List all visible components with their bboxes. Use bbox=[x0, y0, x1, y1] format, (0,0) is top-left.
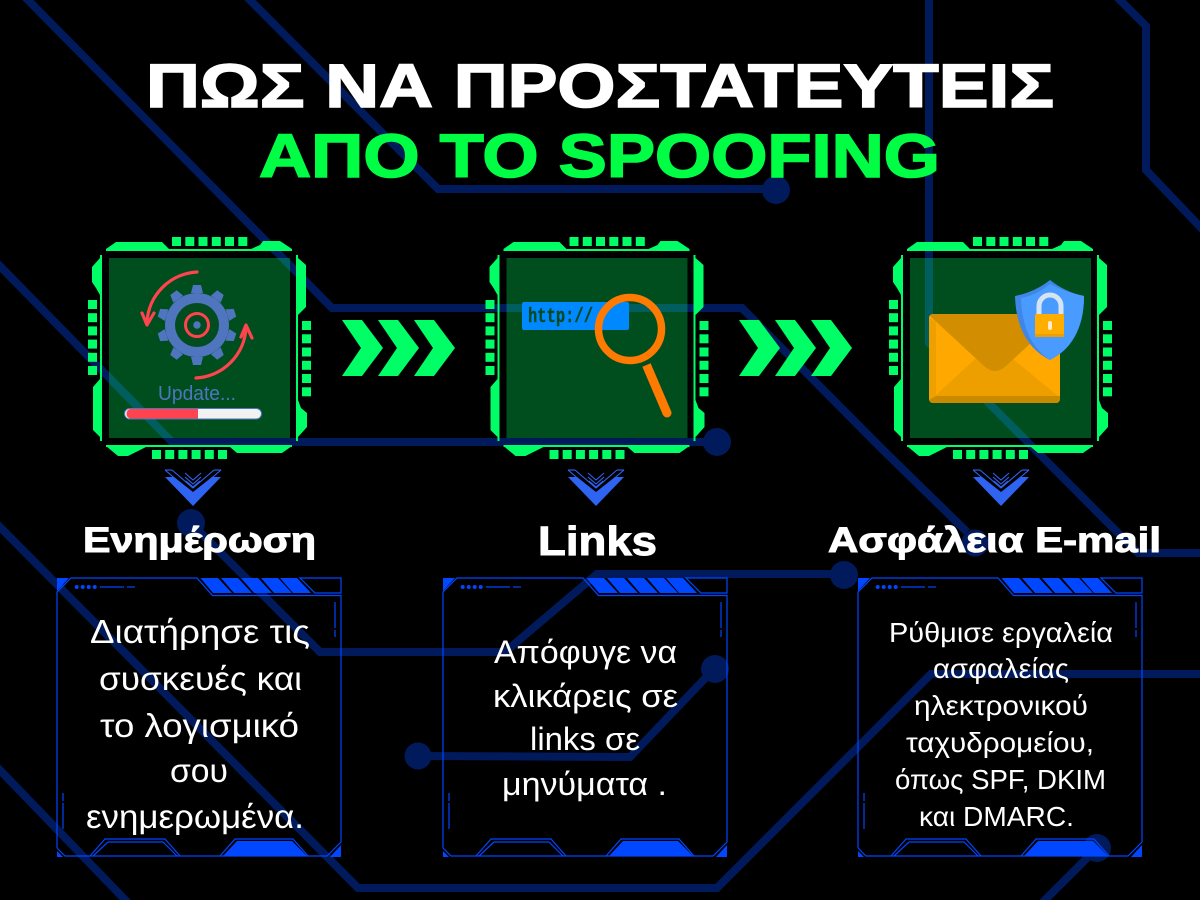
arrows: step 1 to 2 bbox=[342, 320, 455, 376]
title bbox=[146, 52, 1054, 190]
text block: links: μηνύματα . bbox=[502, 766, 667, 802]
panel: email security bbox=[858, 578, 1142, 857]
text block: email security: και DMARC. bbox=[919, 801, 1074, 832]
text block: email security: όπως SPF, DKIM bbox=[895, 764, 1106, 795]
icon: url bar and magnifier: http:// bbox=[528, 306, 593, 329]
text block: update: σου bbox=[170, 753, 228, 790]
text block: email security bbox=[889, 617, 1113, 832]
text block: update: Διατήρησε τις bbox=[90, 614, 310, 651]
update label: Update... bbox=[158, 383, 236, 405]
down arrow 2 bbox=[568, 470, 624, 506]
text block: links: Απόφυγε να bbox=[494, 634, 677, 670]
down arrow 1 bbox=[165, 470, 221, 506]
heading: update: Ενημέρωση bbox=[83, 521, 316, 560]
text block: update: το λογισμικό bbox=[100, 708, 299, 745]
text block: email security: ηλεκτρονικού bbox=[914, 690, 1088, 721]
text block: links: links σε bbox=[530, 721, 640, 757]
text block: email security: Ρύθμισε εργαλεία bbox=[889, 617, 1113, 648]
text block: email security: ταχυδρομείου, bbox=[906, 727, 1094, 758]
chip frame: update bbox=[88, 237, 311, 459]
progress bar bbox=[124, 408, 262, 419]
heading: email security: Ασφάλεια E-mail bbox=[828, 521, 1161, 560]
icon: url bar and magnifier bbox=[522, 298, 672, 418]
panel: update bbox=[57, 578, 341, 857]
text block: update: συσκευές και bbox=[99, 661, 302, 698]
arrows: step 2 to 3 bbox=[739, 320, 852, 376]
chip frame: email bbox=[889, 237, 1112, 459]
icon: gear with update arrows bbox=[142, 272, 252, 378]
text block: email security: ασφαλείας bbox=[933, 653, 1069, 684]
text block: update bbox=[86, 614, 310, 836]
text block: links: κλικάρεις σε bbox=[493, 678, 678, 714]
icon: envelope with shield bbox=[929, 280, 1084, 403]
heading: links: Links bbox=[538, 518, 657, 564]
text block: update: ενημερωμένα. bbox=[86, 799, 304, 836]
chip frame: links bbox=[486, 237, 708, 459]
title line 2: ΑΠΟ ΤΟ SPOOFING bbox=[259, 122, 940, 190]
title line 1: ΠΩΣ ΝΑ ΠΡΟΣΤΑΤΕΥΤΕΙΣ bbox=[146, 52, 1054, 120]
down arrow 3 bbox=[973, 470, 1029, 506]
text block: links bbox=[493, 634, 678, 802]
panel: links bbox=[443, 578, 727, 857]
